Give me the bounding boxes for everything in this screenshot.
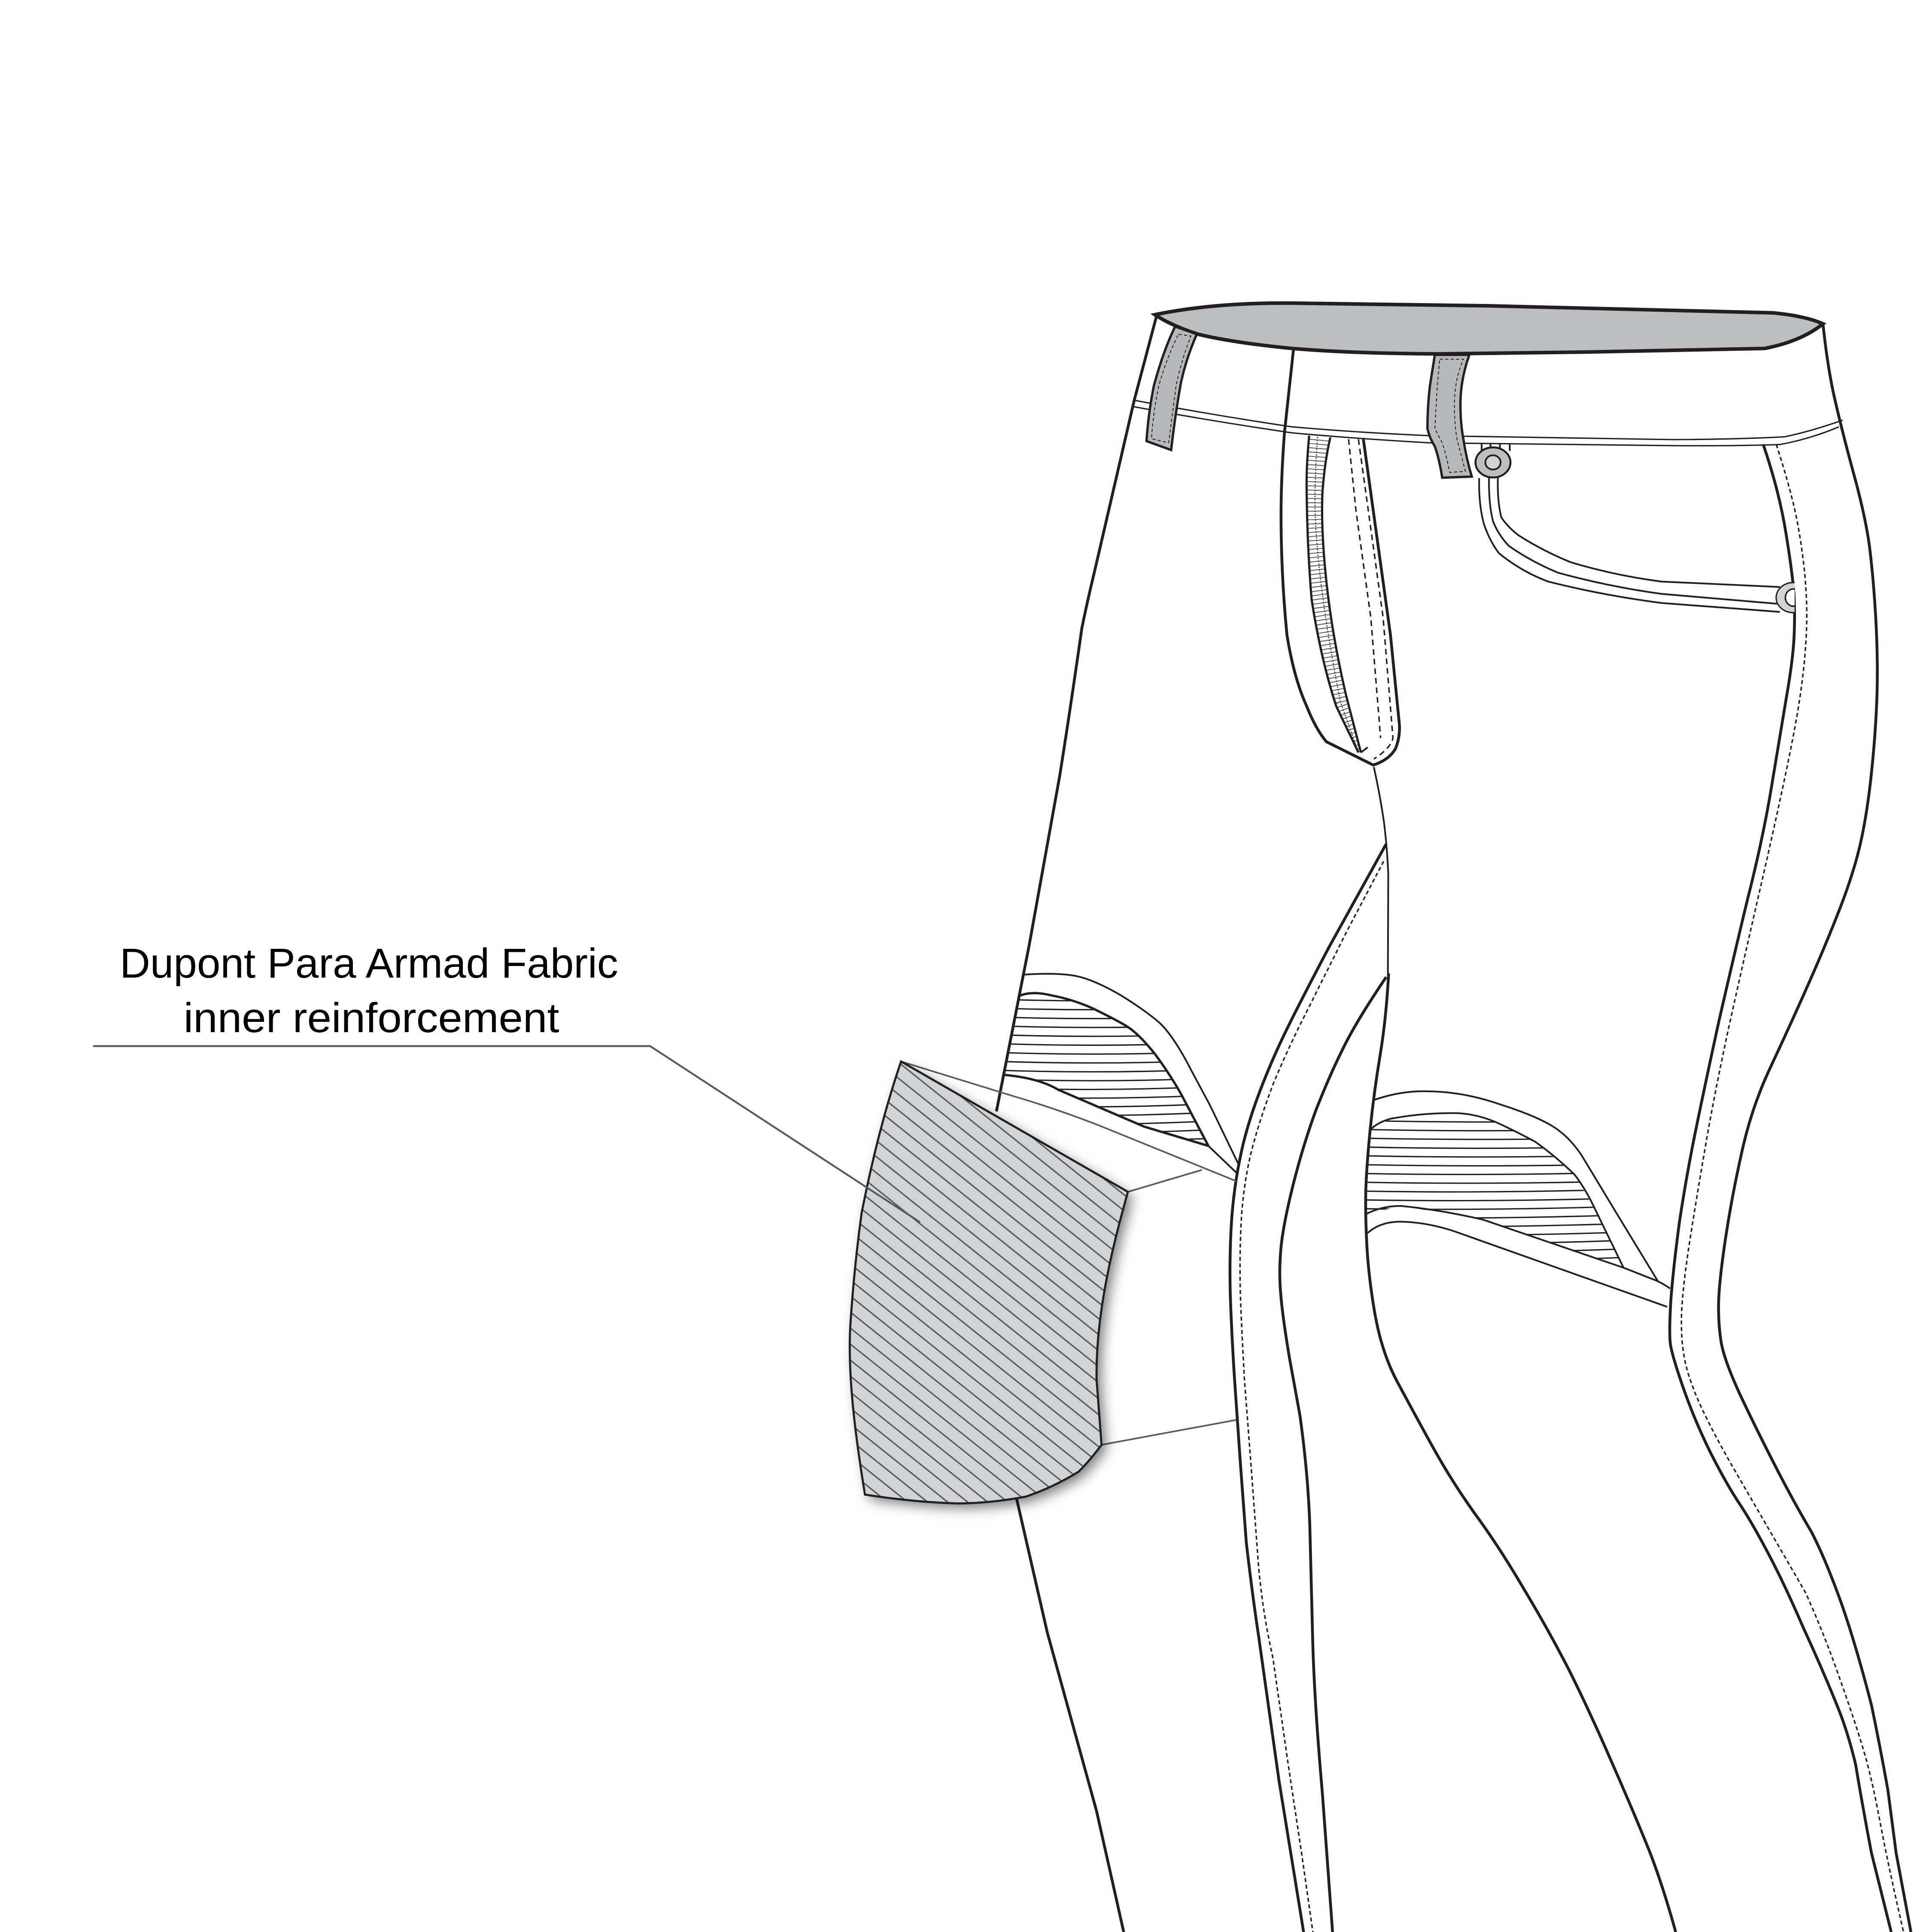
belt loop centre: [1428, 355, 1472, 478]
zipper teeth: [1315, 431, 1360, 758]
pocket stitching: [1479, 444, 1780, 612]
connector lines from swatch to leg: [1102, 1170, 1236, 1445]
button: [1476, 447, 1510, 477]
right leg outer strip: [1670, 324, 1911, 1932]
trousers illustration: [901, 303, 1911, 1932]
left leg inseam strip: [1230, 844, 1386, 1932]
knee panel left: [901, 974, 1238, 1181]
callout label: inner reinforcement: [184, 994, 559, 1041]
callout label: Dupont Para Armad Fabric: [120, 940, 618, 987]
front fly: [1281, 350, 1400, 765]
rivet: [1775, 582, 1795, 613]
leader line: [93, 1046, 920, 1222]
waist opening: [1155, 303, 1823, 354]
right leg inner seam: [1366, 973, 1676, 1932]
callout label: [120, 940, 618, 1041]
waistband stitching: [1133, 400, 1843, 446]
left leg outer seam: [996, 317, 1156, 1932]
crotch centre seam: [1374, 767, 1388, 975]
knee panel right: [1361, 1091, 1670, 1307]
belt loop left: [1146, 327, 1197, 450]
fabric swatch: [850, 1061, 1128, 1504]
